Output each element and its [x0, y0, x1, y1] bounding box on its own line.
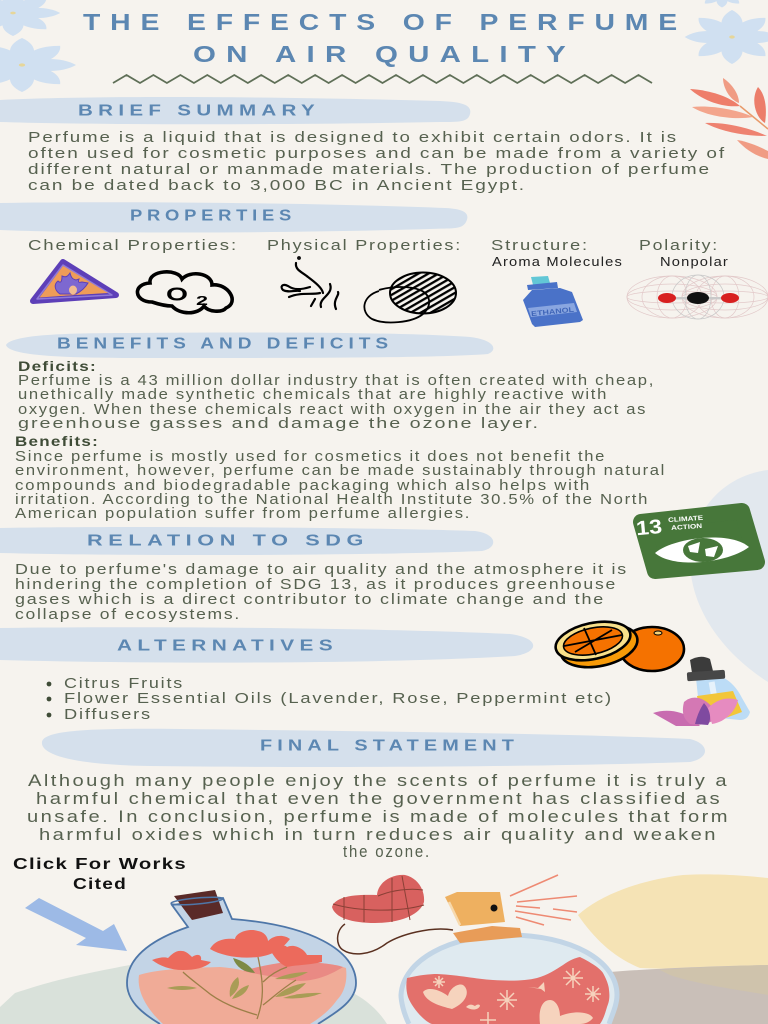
illustration: perfume bottle: [401, 875, 617, 1024]
heading: relation to SDG: RELATION TO SDG: [87, 532, 369, 550]
cap and collar: [445, 892, 505, 926]
icon: overlapping circles: [364, 272, 456, 322]
illustration: heart balloon: [332, 875, 453, 954]
arrow: [25, 898, 127, 951]
bottle outline: [401, 935, 617, 1024]
text: summary body: often used for cosmetic purposes and can be made from a variety of: [28, 145, 726, 162]
icon: oranges: [552, 615, 684, 674]
text: O2: O: [166, 284, 188, 304]
heading: brief summary: BRIEF SUMMARY: [78, 102, 320, 120]
text: summary body: Perfume is a liquid that is designed to exhibit certain odors. It is: [28, 129, 678, 146]
heading pill: benefits and deficits: [6, 332, 493, 358]
illustration: grey stone: [610, 965, 768, 1024]
background blob right: [690, 470, 768, 682]
cork: [174, 890, 223, 920]
sparkles: [433, 968, 601, 1024]
flowers top-right: [685, 0, 768, 64]
text: final body: [27, 772, 730, 861]
text: bullet list: Flower Essential Oils (Lavender, Rose, Peppermint etc): [64, 690, 613, 707]
text: click for works cited: [13, 856, 187, 893]
heading: alternatives: ALTERNATIVES: [117, 638, 338, 654]
bottle glass fill: [401, 935, 617, 1024]
panel: brief summary: [0, 97, 726, 194]
labels: Structure:: [491, 237, 589, 254]
text: click for works cited: Click For Works: [13, 856, 187, 873]
text: summary body: [28, 129, 726, 194]
text: SDG body: hindering the completion of SDG 13, as it produces greenhouse: [15, 576, 617, 593]
leaves top-right: [690, 78, 768, 159]
labels: Chemical Properties:: [28, 237, 238, 254]
panel: benefits and deficits: [6, 332, 666, 522]
text: benefits: American population suffer from perfume allergies.: [15, 505, 471, 522]
text: SDG body: [15, 561, 628, 623]
liquid: [139, 962, 346, 1024]
heading pill: relation to SDG: [0, 527, 493, 555]
text: deficits: greenhouse gasses and damage the ozone layer.: [18, 415, 540, 432]
text: final body: Although many people enjoy the scents of perfume it is truly a: [28, 772, 729, 790]
icon: essential oil dropper bottle: [653, 657, 750, 726]
labels: Nonpolar: [660, 255, 729, 269]
icon: SDG 13 climate action: [635, 511, 757, 571]
text: deficits: Deficits:: [18, 359, 97, 374]
panel: relation to SDG: [0, 527, 628, 623]
text: benefits: [15, 434, 666, 522]
illustration: flower flask: [127, 890, 356, 1024]
text: O2: 2: [196, 293, 208, 308]
text: SDG body: gases which is a direct contributor to climate change and the: [15, 591, 605, 608]
heading pill: final statement: [42, 729, 705, 767]
text: benefits: Since perfume is mostly used for cosmetics it does not benefit the: [15, 448, 606, 465]
hearts: [423, 982, 593, 1024]
text: summary body: can be dated back to 3,000 BC in Ancient Egypt.: [28, 177, 526, 194]
heading: properties: PROPERTIES: [130, 208, 296, 224]
icon: flammable triangle: [33, 262, 116, 301]
panel: alternatives: [0, 627, 613, 723]
flask glass fill: [127, 898, 356, 1024]
text: bullet list: [47, 675, 613, 723]
title: [83, 9, 687, 67]
illustration: yellow blob: [578, 874, 768, 969]
panel: final statement: [27, 729, 730, 861]
labels: [28, 237, 729, 269]
text: deficits: [18, 359, 655, 432]
labels: Polarity:: [639, 237, 719, 254]
icon: ethanol bottle: ETHANOL: [531, 307, 575, 318]
icon: nonpolar molecule: [627, 275, 768, 319]
heading pill: alternatives: [0, 627, 533, 663]
text: deficits: Perfume is a 43 million dollar industry that is often created with cheap,: [18, 372, 655, 389]
text: final body: harmful chemical that even the government has classified as: [36, 790, 722, 808]
heading: benefits and deficits: BENEFITS AND DEFICITS: [57, 336, 393, 352]
title: ON AIR QUALITY: [193, 41, 576, 67]
title: THE EFFECTS OF PERFUME: [83, 9, 687, 35]
heading pill: brief summary: [0, 97, 470, 124]
string: [338, 924, 453, 954]
heading pill: properties: [0, 202, 467, 233]
heading: final statement: FINAL STATEMENT: [260, 738, 519, 754]
zigzag divider: [113, 75, 652, 83]
cork band: [171, 896, 223, 906]
text: final body: harmful oxides which in turn reduces air quality and weaken: [39, 826, 718, 844]
text: final body: the ozone.: [343, 843, 431, 861]
liquid hump: [243, 962, 343, 981]
flowers top-left: [0, 0, 76, 92]
stems and leaves: [167, 957, 322, 1019]
flask outline: [127, 898, 356, 1024]
text: deficits: unethically made synthetic chemicals that are highly reactive with: [18, 386, 608, 403]
text: benefits: irritation. According to the National Health Institute 30.5% of the North: [15, 491, 649, 508]
panel: properties: [0, 202, 768, 327]
text: SDG body: collapse of ecosystems.: [15, 606, 241, 623]
icon: ethanol bottle: [523, 276, 583, 327]
text: benefits: Benefits:: [15, 434, 99, 449]
labels: Aroma Molecules: [492, 255, 623, 269]
text: summary body: different natural or manmade materials. The production of perfume: [28, 161, 711, 178]
spray lines: [510, 875, 577, 925]
text: O2: [166, 284, 208, 308]
perfume liquid: [406, 957, 609, 1024]
text: bullet list: Citrus Fruits: [64, 675, 184, 692]
icon: SDG 13 climate action: CLIMATE: [668, 515, 704, 524]
text: bullet list: Diffusers: [64, 706, 152, 723]
text: click for works cited: Cited: [73, 876, 127, 893]
icon: SDG 13 climate action: ACTION: [671, 523, 703, 532]
text: deficits: oxygen. When these chemicals react with oxygen in the air they act as: [18, 401, 647, 418]
ground blob green: [0, 965, 387, 1024]
labels: Physical Properties:: [267, 237, 462, 254]
icon: oxygen cloud: [137, 272, 232, 313]
text: benefits: compounds and biodegradable packaging which also helps with: [15, 477, 591, 494]
icon: SDG 13 climate action: 13: [635, 516, 663, 540]
text: final body: unsafe. In conclusion, perfume is made of molecules that form: [27, 808, 730, 826]
icon: nose and scent: [282, 257, 338, 309]
flowers: [152, 930, 322, 970]
text: SDG body: Due to perfume's damage to air quality and the atmosphere it is: [15, 561, 628, 578]
text: benefits: environment, however, perfume can be made sustainably through natural: [15, 462, 666, 479]
